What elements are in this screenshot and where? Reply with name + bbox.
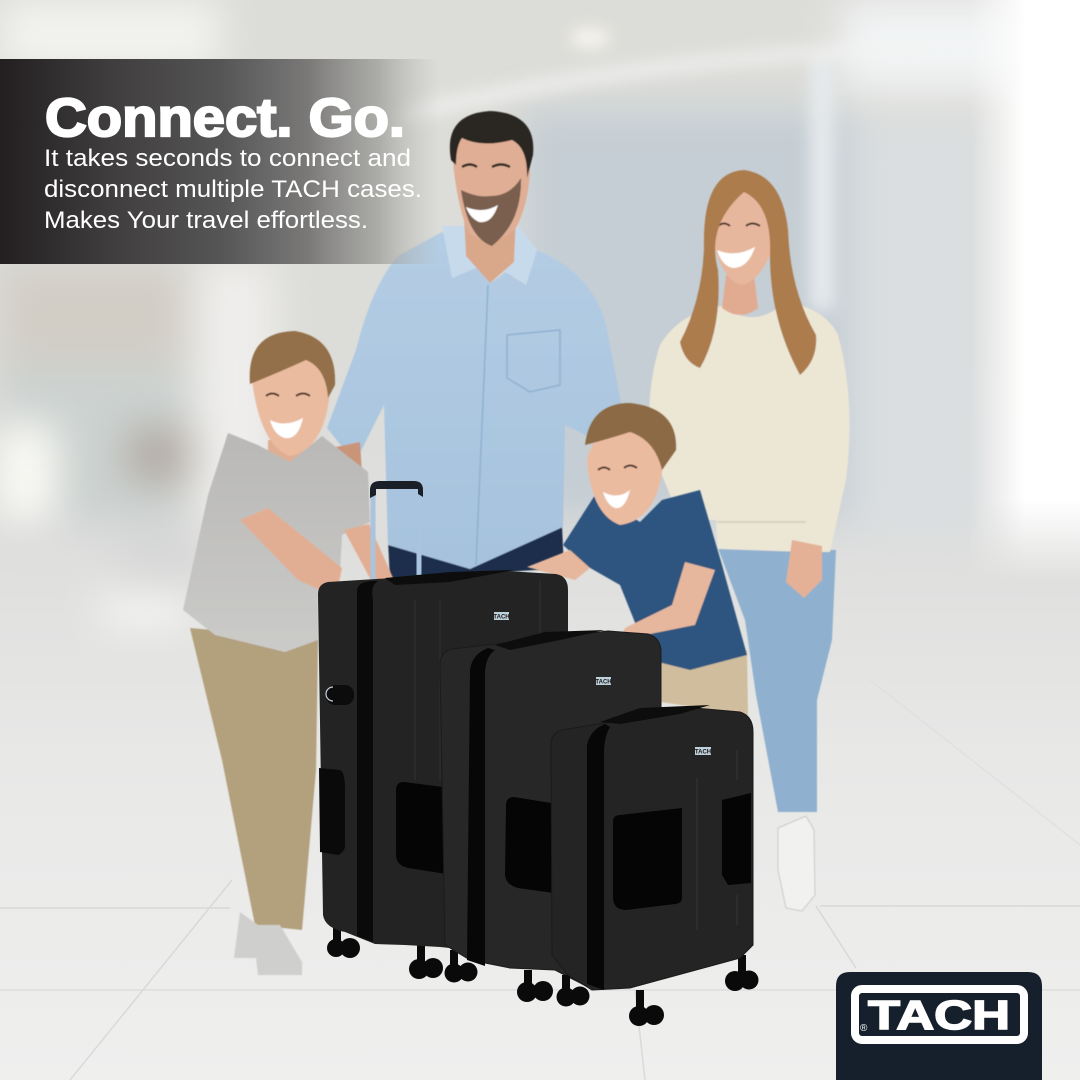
logo wordmark: TACH <box>868 992 1010 1038</box>
small case body <box>551 708 753 990</box>
small case top straps <box>600 705 710 724</box>
large case top straps <box>385 570 515 585</box>
description: It takes seconds to connect and <box>44 145 411 172</box>
left boy's shoes <box>234 912 302 975</box>
small case side panel <box>722 793 751 885</box>
medium case top straps <box>495 630 605 650</box>
shirt collar <box>442 226 537 285</box>
woman's hair <box>680 170 816 375</box>
man's hand <box>336 442 362 474</box>
bright window on the right <box>970 0 1080 580</box>
woman's neck and face <box>722 275 758 315</box>
right boy's hair <box>585 403 676 470</box>
left boy's eyes <box>266 394 310 396</box>
large case wheels <box>327 925 443 979</box>
right boy's eyes <box>598 466 637 470</box>
woman's jeans <box>718 548 836 812</box>
woman's sweater <box>649 302 850 552</box>
left boy's arms <box>240 508 342 597</box>
medium case wheels <box>444 950 553 1002</box>
man <box>327 111 622 580</box>
large case front panel <box>396 782 466 877</box>
man's hair <box>450 111 533 178</box>
description: Makes Your travel effortless. <box>44 207 368 234</box>
luggage telescoping handle <box>370 481 423 580</box>
left boy's hair <box>250 331 335 398</box>
small case zipper band <box>587 724 610 990</box>
large suitcase <box>318 570 568 979</box>
large case side handle <box>326 685 354 705</box>
woman's shoe <box>778 816 815 911</box>
large case side panel <box>319 768 345 855</box>
man's eyes <box>462 164 510 167</box>
large case badge: TACH <box>493 614 510 620</box>
description: disconnect multiple TACH cases. <box>44 176 422 203</box>
left boy's neck <box>268 440 312 470</box>
sweater hem ribbing <box>717 521 806 523</box>
man's beard <box>461 178 521 246</box>
small suitcase <box>551 705 758 1026</box>
registered mark: ® <box>860 1023 868 1034</box>
right boy's face <box>587 430 662 525</box>
medium suitcase <box>440 630 661 1002</box>
boy on the right <box>527 403 748 715</box>
right boy's tee <box>563 490 747 670</box>
small case front panel <box>613 808 682 910</box>
left boy's trousers <box>190 628 318 930</box>
right boy's shorts <box>661 650 748 715</box>
medium case front panel <box>505 797 582 897</box>
banner gradient <box>0 59 440 264</box>
medium case connector strap <box>563 748 579 806</box>
TACH logo badge <box>836 972 1042 1080</box>
man's shirt <box>327 232 622 569</box>
logo frame <box>855 989 1024 1040</box>
woman's hand <box>786 540 822 598</box>
headline banner <box>0 59 440 264</box>
small case wheels <box>556 955 758 1026</box>
right boy's arms <box>527 550 590 580</box>
large case moulded ribs <box>415 580 540 780</box>
shirt pocket and placket <box>476 285 560 565</box>
boy on the left <box>183 331 394 975</box>
small case moulded ribs <box>697 750 737 930</box>
medium case body <box>440 631 661 988</box>
man's neck and face <box>464 215 516 283</box>
small case badge: TACH <box>695 750 711 756</box>
heading: Connect. Go. <box>45 88 405 148</box>
description <box>44 145 422 234</box>
medium case zipper band <box>467 648 495 966</box>
man's trousers <box>388 526 564 580</box>
left boy's tee <box>183 433 370 652</box>
left boy's face <box>252 354 329 456</box>
large case body <box>318 571 568 950</box>
large case zipper band <box>357 581 378 942</box>
medium case badge: TACH <box>595 680 612 686</box>
woman's eyes <box>718 224 760 226</box>
woman <box>649 170 850 911</box>
